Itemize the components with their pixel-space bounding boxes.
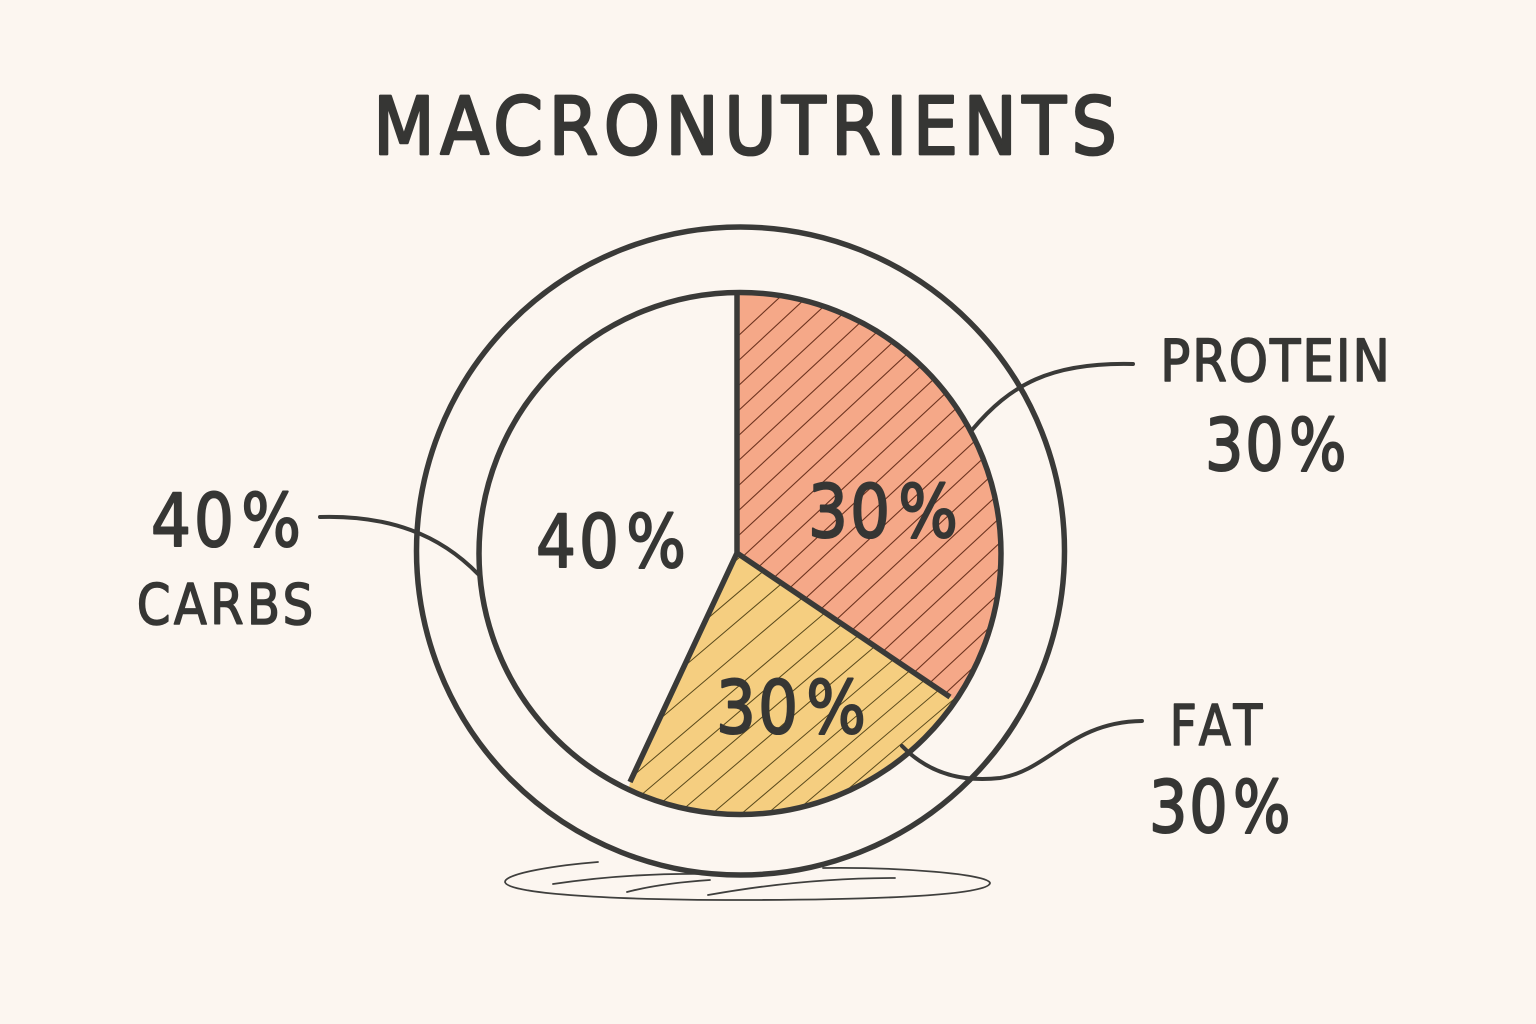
slice label: fat: 30% bbox=[716, 667, 866, 751]
leader line: carbs bbox=[320, 517, 478, 574]
protein slice bbox=[740, 295, 998, 699]
outer ring bbox=[416, 227, 1064, 875]
pie chart bbox=[414, 224, 1068, 878]
value: fat: 30% bbox=[1149, 765, 1290, 849]
label: fat: FAT bbox=[1170, 694, 1263, 759]
slice label: protein: 30% bbox=[808, 471, 958, 555]
label: protein: PROTEIN bbox=[1160, 327, 1390, 395]
ground shadow bbox=[505, 862, 990, 900]
slice label: carbs: 40% bbox=[536, 501, 686, 585]
value: carbs: 40% bbox=[151, 480, 301, 564]
value: protein: 30% bbox=[1205, 403, 1346, 487]
leader line: protein bbox=[972, 364, 1133, 430]
fat slice bbox=[629, 557, 954, 812]
title: MACRONUTRIENTS bbox=[373, 80, 1117, 173]
leader line: fat bbox=[902, 721, 1142, 779]
carbs slice bbox=[479, 292, 1001, 814]
slice borders bbox=[479, 292, 1001, 814]
label: carbs: CARBS bbox=[137, 574, 313, 638]
